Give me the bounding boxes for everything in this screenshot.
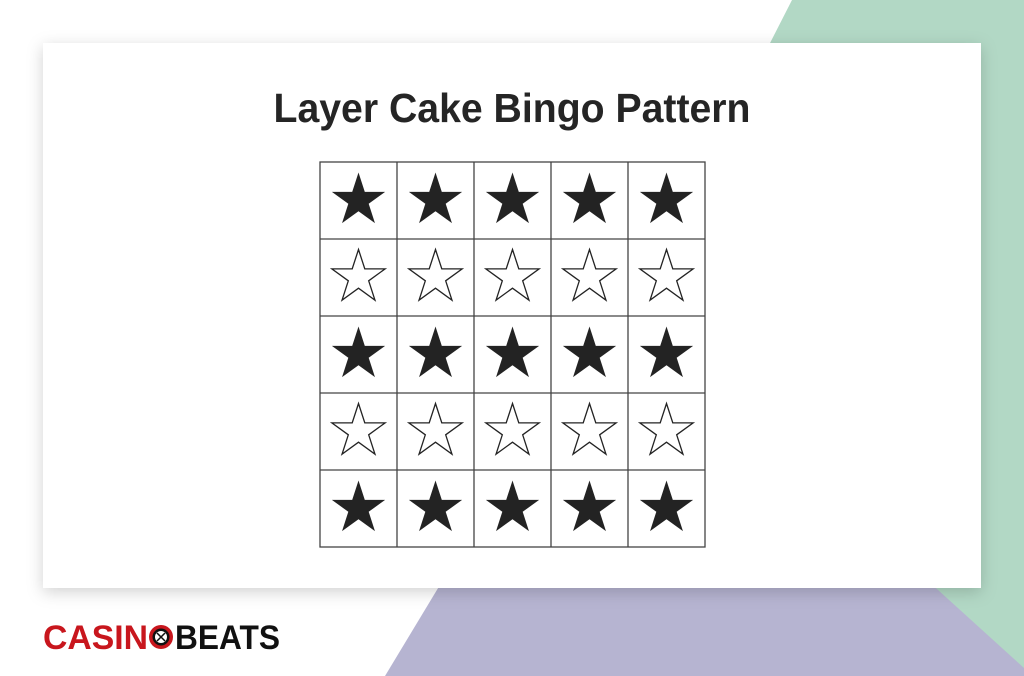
row 1: filled stars [332,172,693,223]
card panel [43,43,981,588]
row 4: outline stars [332,404,693,454]
row 3: filled stars [332,326,693,377]
row 5: filled stars [332,480,693,531]
logo: CasinoBeats [43,619,280,657]
row 2: outline stars [332,250,693,300]
background: green shape [700,0,1024,672]
logo: CasinoBeats: BEATS [175,619,280,657]
title: Layer Cake Bingo Pattern [274,85,750,131]
bingo grid [320,162,705,547]
icon: roulette wheel [149,625,173,649]
background: purple shape [385,560,1024,676]
logo: CasinoBeats: CASIN [43,619,148,657]
